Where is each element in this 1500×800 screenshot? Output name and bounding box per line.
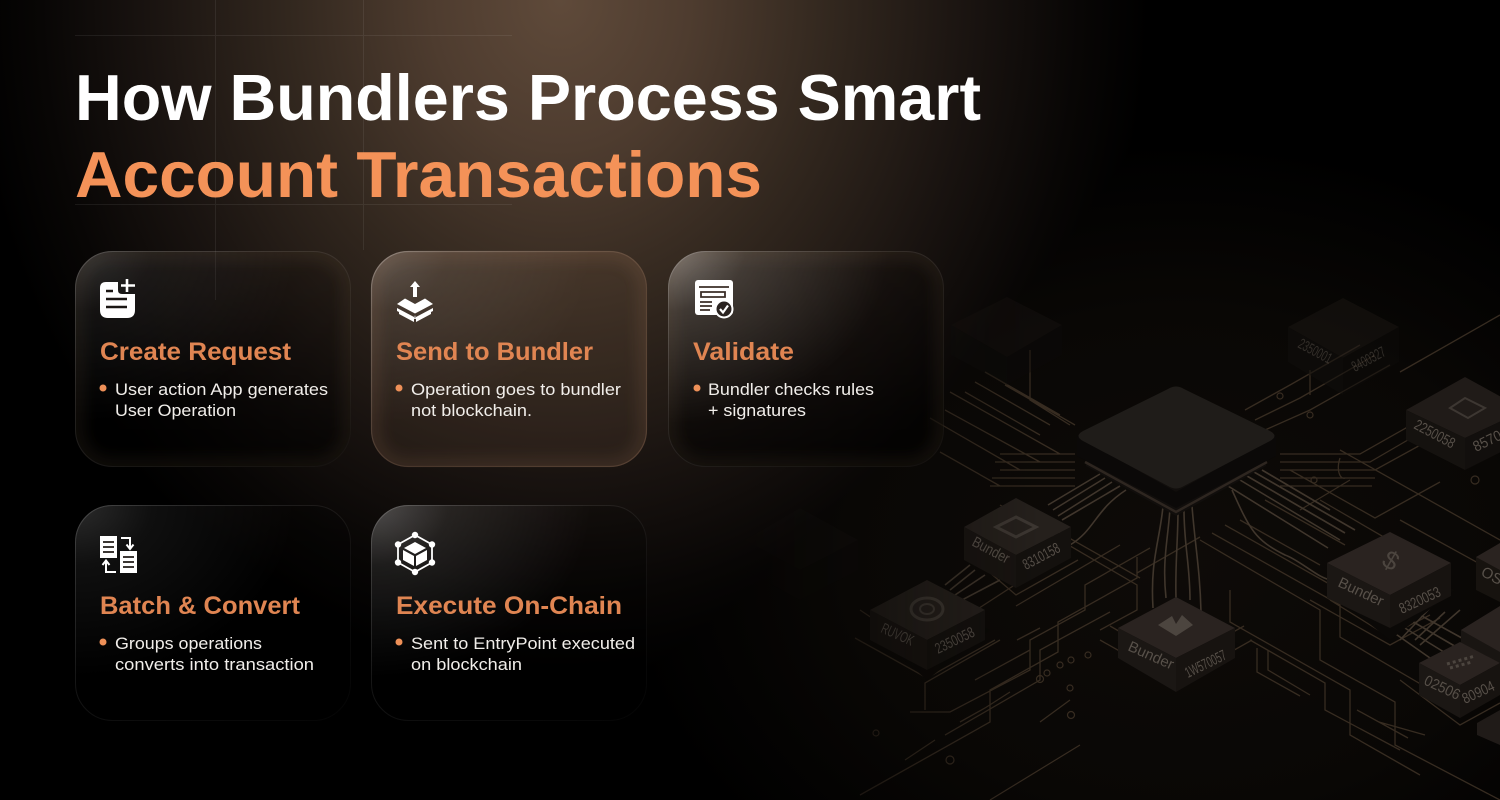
icon: box with upload arrow [397,281,433,322]
chip: faint top [985,350,1030,385]
bullet [694,384,700,392]
chip: faint top right: 2350001 [1295,336,1335,367]
heading: Batch & Convert [100,592,301,620]
chip: bottom right [1477,710,1500,745]
chip: RUVOK 2350058: RUVOK [878,620,916,649]
heading: Send to Bundler [396,338,593,366]
body text [115,635,314,674]
chip: faint top right: 8400327 [1349,344,1389,376]
body text: Groups operations [115,635,262,653]
body text: Sent to EntryPoint executed [411,635,635,653]
chip: Bunder 8310158: 8310158 [1020,540,1063,574]
chip: Bunder 1W570057: Bunder [1125,638,1176,673]
body text [708,381,874,420]
body text: Operation goes to bundler [411,381,622,399]
body text [115,381,328,420]
icon: document plus [100,279,135,318]
title line 1: How Bundlers Process Smart [75,61,981,134]
chip: RUVOK 2350058: 2350058 [932,624,978,658]
icon: cube in network [395,532,435,575]
circuit board illustration [855,298,1500,800]
title [75,61,981,211]
chip: Bunder 8320053 [1327,532,1455,640]
body text: User action App generates [115,381,328,399]
panel: Execute On-Chain [371,505,647,721]
heading: Execute On-Chain [396,592,622,620]
panel: Batch & Convert [75,505,351,721]
chip: middle right [1461,606,1500,663]
body text: Bundler checks rules [708,381,874,399]
chip: 2250058 right: 2250058 [1411,417,1458,452]
chip: Bunder 1W570057 [1118,597,1240,692]
chip: Bunder 1W570057: 1W570057 [1182,647,1229,682]
body text: not blockchain. [411,402,532,420]
icon: documents swap [100,536,137,573]
panel: Validate [668,251,944,467]
bullet [100,384,106,392]
body text [411,635,635,674]
body text [411,381,622,420]
chip: 2250058 right [1406,377,1500,470]
title line 2: Account Transactions [75,138,762,211]
panel: Send to Bundler [371,251,647,467]
heading: Validate [693,338,794,366]
bullet [100,638,106,646]
body text: on blockchain [411,656,522,674]
chip: Bunder 8320053: $ [1377,544,1405,577]
body text: User Operation [115,402,236,420]
chip: Bunder 8310158: Bunder [969,534,1012,567]
body text: + signatures [708,402,806,420]
body text: converts into transaction [115,656,314,674]
icon: checklist with checkmark [695,280,734,318]
bullet [396,384,402,392]
chip: central processor [1077,386,1276,516]
chip: 02506 80904 [1419,642,1500,718]
decorative grid lines [75,0,512,300]
heading: Create Request [100,338,292,366]
circuit pads [873,393,1479,764]
chip: Bunder 8320053: Bunder [1335,574,1386,610]
panel: Create Request [75,251,351,467]
chip: RUVOK 2350058 [870,580,990,680]
chip: Bunder 8320053: 8320053 [1397,584,1444,618]
chip: Bunder 8310158 [964,498,1071,588]
chip: faint top right [1288,298,1399,395]
chip: faint RUVOK left [745,508,858,600]
chip: OSS right [1476,543,1500,602]
chip: 02506 80904: 02506 [1421,672,1463,704]
bullet [396,638,402,646]
